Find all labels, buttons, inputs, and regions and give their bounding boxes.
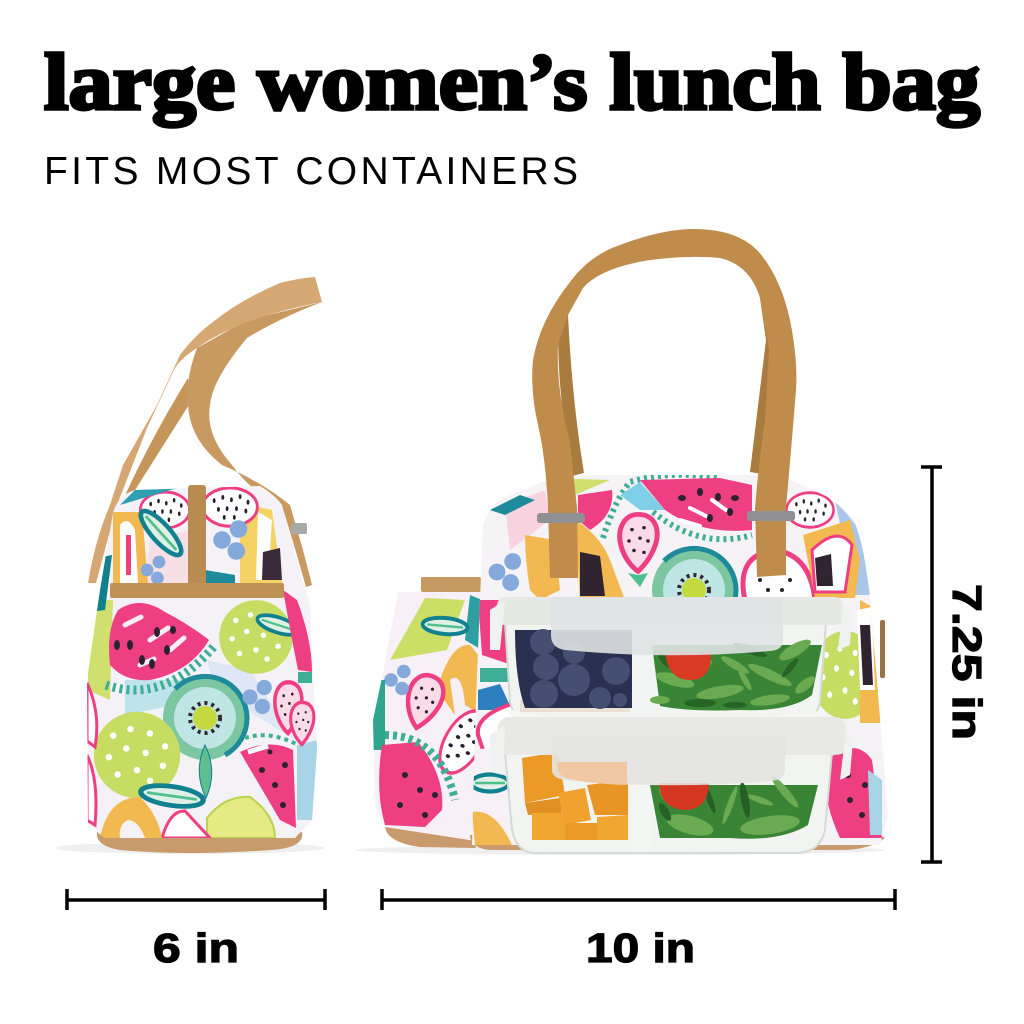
pastel streaks <box>148 530 188 583</box>
side shadow <box>55 842 325 854</box>
title: large women’s lunch bag <box>44 39 980 127</box>
label: 6 in <box>153 925 239 971</box>
label: 7.25 in <box>944 584 990 740</box>
salad <box>650 774 818 840</box>
lid <box>497 597 843 625</box>
glass container: top <box>490 597 852 722</box>
side pocket band <box>421 577 481 592</box>
clip tint over squash <box>557 762 627 785</box>
side zipper <box>188 485 206 585</box>
tomato <box>659 783 709 810</box>
tomato <box>665 652 711 680</box>
zipper pull <box>880 620 885 678</box>
height dimension: 7.25 in <box>921 467 990 862</box>
front shadow <box>355 845 885 855</box>
glass body <box>505 752 832 853</box>
glass container: bottom <box>490 717 853 853</box>
side buckle <box>291 523 307 534</box>
front handle <box>532 229 796 578</box>
side base <box>97 832 302 853</box>
bottom rim <box>510 712 825 722</box>
lid clip <box>552 735 785 785</box>
width dimension: 10 in <box>382 889 895 971</box>
side bag body pattern <box>80 480 325 845</box>
side view bag <box>55 277 325 854</box>
side pocket band <box>110 583 284 598</box>
clip ends <box>490 725 853 780</box>
label: 10 in <box>586 925 695 971</box>
subtitle: FITS MOST CONTAINERS <box>44 150 578 193</box>
side pocket base <box>385 825 476 848</box>
back handle straps <box>558 298 772 476</box>
salad <box>650 636 822 710</box>
front bag body pattern <box>470 470 895 850</box>
glass body <box>505 622 826 722</box>
divider <box>633 622 650 722</box>
lid clip <box>551 597 783 655</box>
squash cubes <box>522 752 628 840</box>
lid <box>497 717 846 755</box>
clip ends <box>490 600 852 650</box>
side pocket <box>373 592 480 840</box>
front view bag <box>355 229 895 855</box>
blueberries <box>515 629 632 712</box>
front base <box>470 835 885 850</box>
pastel streaks <box>505 490 550 550</box>
buckles <box>537 513 585 523</box>
side handles <box>88 277 322 587</box>
width dimension: 6 in <box>67 889 325 971</box>
divider <box>633 752 650 852</box>
